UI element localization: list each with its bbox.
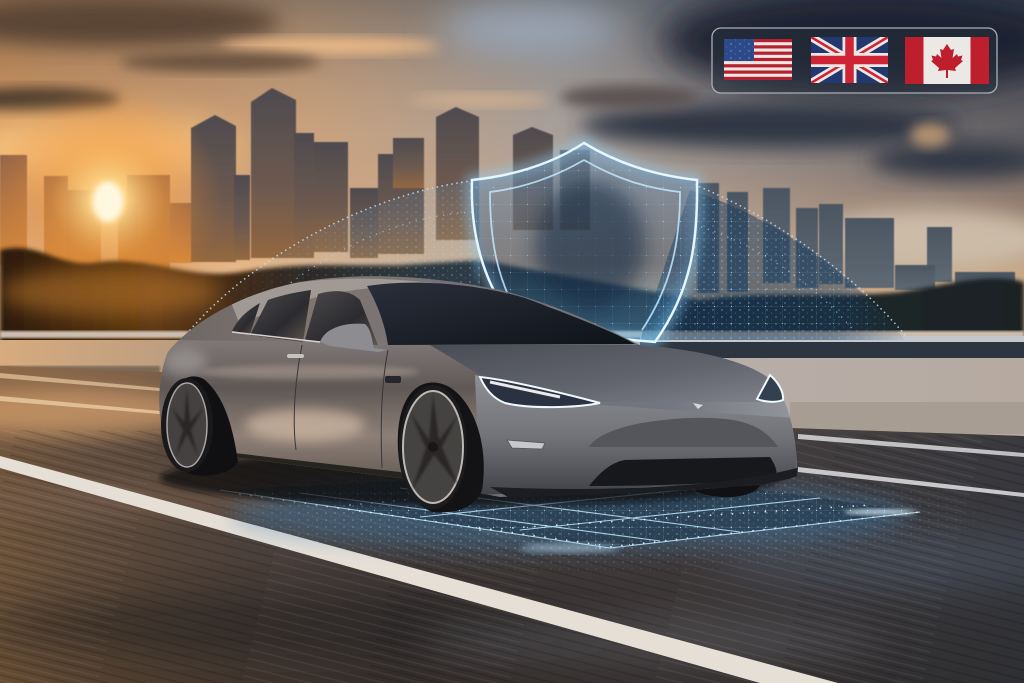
tesla badge xyxy=(693,403,703,409)
windshield xyxy=(367,283,635,345)
front grille xyxy=(589,457,777,486)
side vent xyxy=(385,376,401,383)
left buildings xyxy=(0,155,192,275)
city skyline xyxy=(0,88,1015,293)
car xyxy=(155,276,797,512)
door lines xyxy=(294,345,388,468)
flag: United Kingdom xyxy=(811,37,888,83)
data network dome xyxy=(190,180,905,340)
flag panel xyxy=(712,28,997,93)
right buildings xyxy=(697,183,1015,293)
car ground shadow xyxy=(160,450,780,506)
body shading xyxy=(155,279,797,500)
front wheel xyxy=(398,383,484,512)
highway barrier xyxy=(0,331,1024,440)
sun glow xyxy=(0,85,223,315)
nose panel xyxy=(589,418,778,447)
tree line xyxy=(0,248,1024,345)
centre buildings xyxy=(191,88,590,262)
bumper lip xyxy=(490,468,797,498)
door handle xyxy=(287,354,304,358)
right headlight xyxy=(757,375,783,402)
car body xyxy=(159,276,797,497)
lane markings xyxy=(0,373,160,391)
tree glow xyxy=(0,268,220,316)
rear wheel arch and wheel xyxy=(161,376,238,476)
sky background xyxy=(0,0,1024,340)
digital grid on road xyxy=(190,464,992,572)
fog light xyxy=(507,440,545,449)
flag: Canada xyxy=(905,37,989,84)
road surface xyxy=(0,366,1024,683)
flag: USA xyxy=(724,39,792,80)
window chrome trim xyxy=(232,332,320,342)
side windows xyxy=(232,290,378,345)
shield xyxy=(460,140,710,350)
left headlight xyxy=(480,377,600,407)
far front tyre xyxy=(695,485,760,497)
wing mirror xyxy=(320,324,388,352)
main white lane line xyxy=(0,456,838,683)
